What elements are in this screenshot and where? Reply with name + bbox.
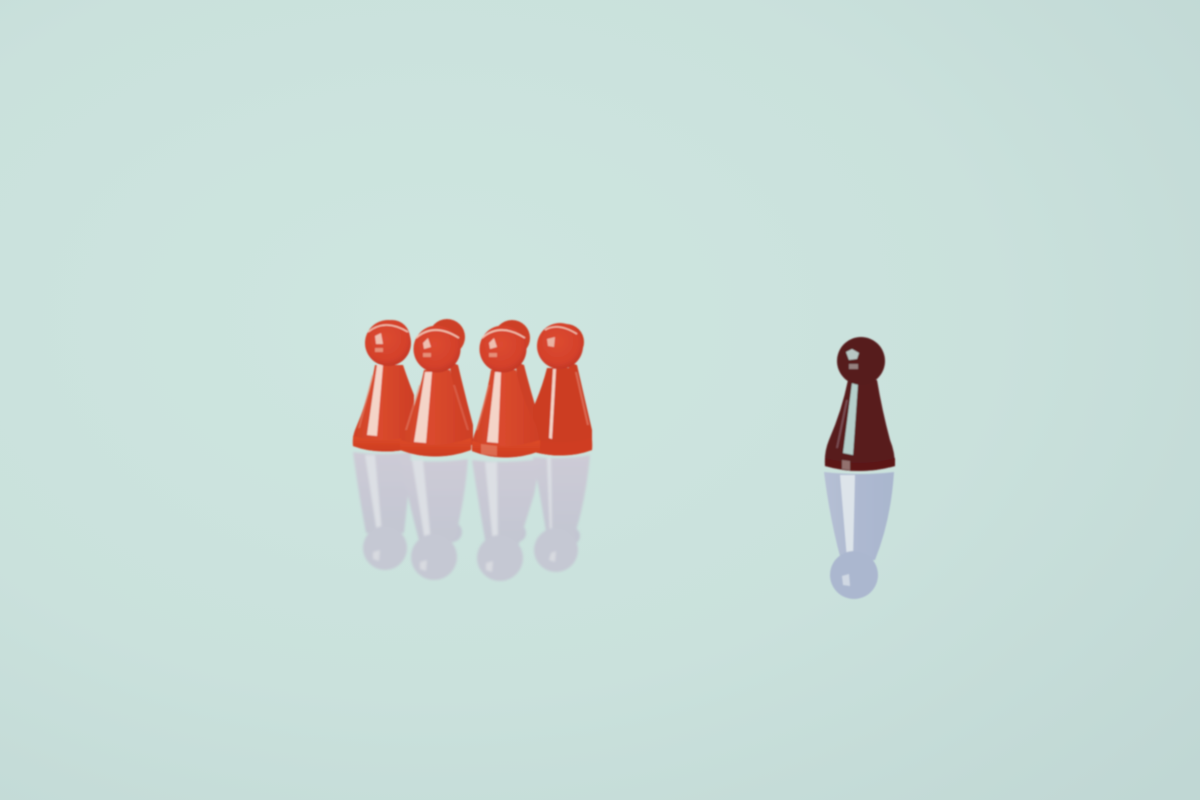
pawn: centre left front (400, 326, 471, 456)
reflection: left pawn (353, 452, 411, 570)
pawn: back right (548, 324, 592, 445)
pawn: back centre right (494, 320, 535, 440)
pawn: back left (374, 320, 410, 356)
reflection: far right pawn (533, 455, 590, 572)
reflection: centre-right pawn (472, 459, 540, 581)
pawn: lone dark (825, 337, 895, 471)
reflection: centre-left pawn (400, 459, 468, 580)
pawn: back centre left (429, 319, 473, 445)
group: red pawns (353, 319, 592, 458)
reflections of red pawns (353, 452, 590, 581)
pawn: left front (353, 320, 414, 452)
pawn: far right front (533, 323, 592, 456)
pawn: centre right front (472, 326, 540, 458)
reflection: dark pawn (824, 472, 894, 599)
reflection: back pawn heads (442, 522, 580, 545)
